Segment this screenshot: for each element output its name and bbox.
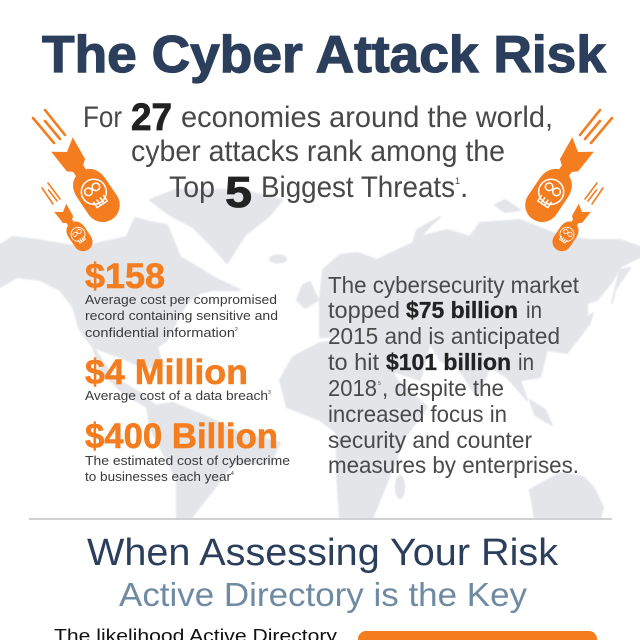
section subheading: Active Directory is the Key bbox=[119, 576, 528, 613]
stat: $158 bbox=[85, 257, 278, 340]
cybersecurity market text block: 5 bbox=[378, 381, 381, 387]
intro statement: For bbox=[83, 101, 122, 134]
section heading: When Assessing Your Risk bbox=[87, 532, 559, 574]
title: The Cyber Attack Risk bbox=[42, 26, 606, 84]
intro statement: . bbox=[460, 171, 468, 204]
stat: $158: record containing sensitive and bbox=[85, 308, 278, 323]
stat: $400 Billion bbox=[85, 417, 290, 484]
icon: small bomb left bbox=[42, 183, 96, 255]
stat: $158: 2 bbox=[235, 327, 238, 333]
intro statement: cyber attacks rank among the bbox=[131, 135, 505, 168]
intro statement: Biggest Threats bbox=[261, 171, 455, 204]
icon: small bomb right bbox=[549, 183, 603, 255]
cybersecurity market text block: measures by enterprises. bbox=[328, 452, 579, 478]
cybersecurity market text block: $75 billion bbox=[406, 297, 518, 323]
cybersecurity market text block: security and counter bbox=[328, 427, 532, 453]
stat: $4 Million: 3 bbox=[268, 390, 271, 396]
intro statement: 1 bbox=[455, 176, 460, 186]
stat: $400 Billion: $400 Billion bbox=[85, 417, 278, 456]
cybersecurity market text block: The cybersecurity market bbox=[328, 272, 580, 298]
stat: $158: $158 bbox=[85, 257, 165, 296]
cybersecurity market text block: $101 billion bbox=[386, 349, 511, 375]
stat: $400 Billion: The estimated cost of cybercrime bbox=[85, 453, 290, 468]
intro statement bbox=[83, 97, 553, 217]
stat: $158: confidential information bbox=[85, 325, 235, 340]
intro statement: economies around the world, bbox=[181, 101, 553, 134]
stat: $4 Million bbox=[85, 353, 271, 403]
intro statement: 5 bbox=[225, 168, 252, 217]
stat: $4 Million: Average cost of a data breach bbox=[85, 388, 268, 403]
icon: large bomb right bbox=[519, 110, 612, 229]
cybersecurity market text block: to hit bbox=[328, 349, 380, 375]
world map background bbox=[0, 190, 640, 519]
cybersecurity market text block: in bbox=[526, 297, 542, 323]
stat: $400 Billion: to businesses each year bbox=[85, 469, 232, 484]
cybersecurity market text block: 2018 bbox=[328, 375, 377, 401]
cybersecurity market text block: increased focus in bbox=[328, 401, 507, 427]
stat: $4 Million: $4 Million bbox=[85, 353, 248, 392]
intro statement: Top bbox=[169, 171, 215, 204]
intro statement: 27 bbox=[131, 97, 172, 139]
orange callout box bbox=[358, 631, 597, 640]
cybersecurity market text block bbox=[328, 272, 580, 478]
cybersecurity market text block: 2015 and is anticipated bbox=[328, 323, 560, 349]
cybersecurity market text block: , despite the bbox=[382, 375, 504, 401]
stat: $158: Average cost per compromised bbox=[85, 292, 277, 307]
stat: $400 Billion: 4 bbox=[231, 471, 234, 477]
cybersecurity market text block: topped bbox=[328, 297, 400, 323]
cybersecurity market text block: in bbox=[518, 349, 534, 375]
icon: large bomb left bbox=[33, 110, 126, 229]
